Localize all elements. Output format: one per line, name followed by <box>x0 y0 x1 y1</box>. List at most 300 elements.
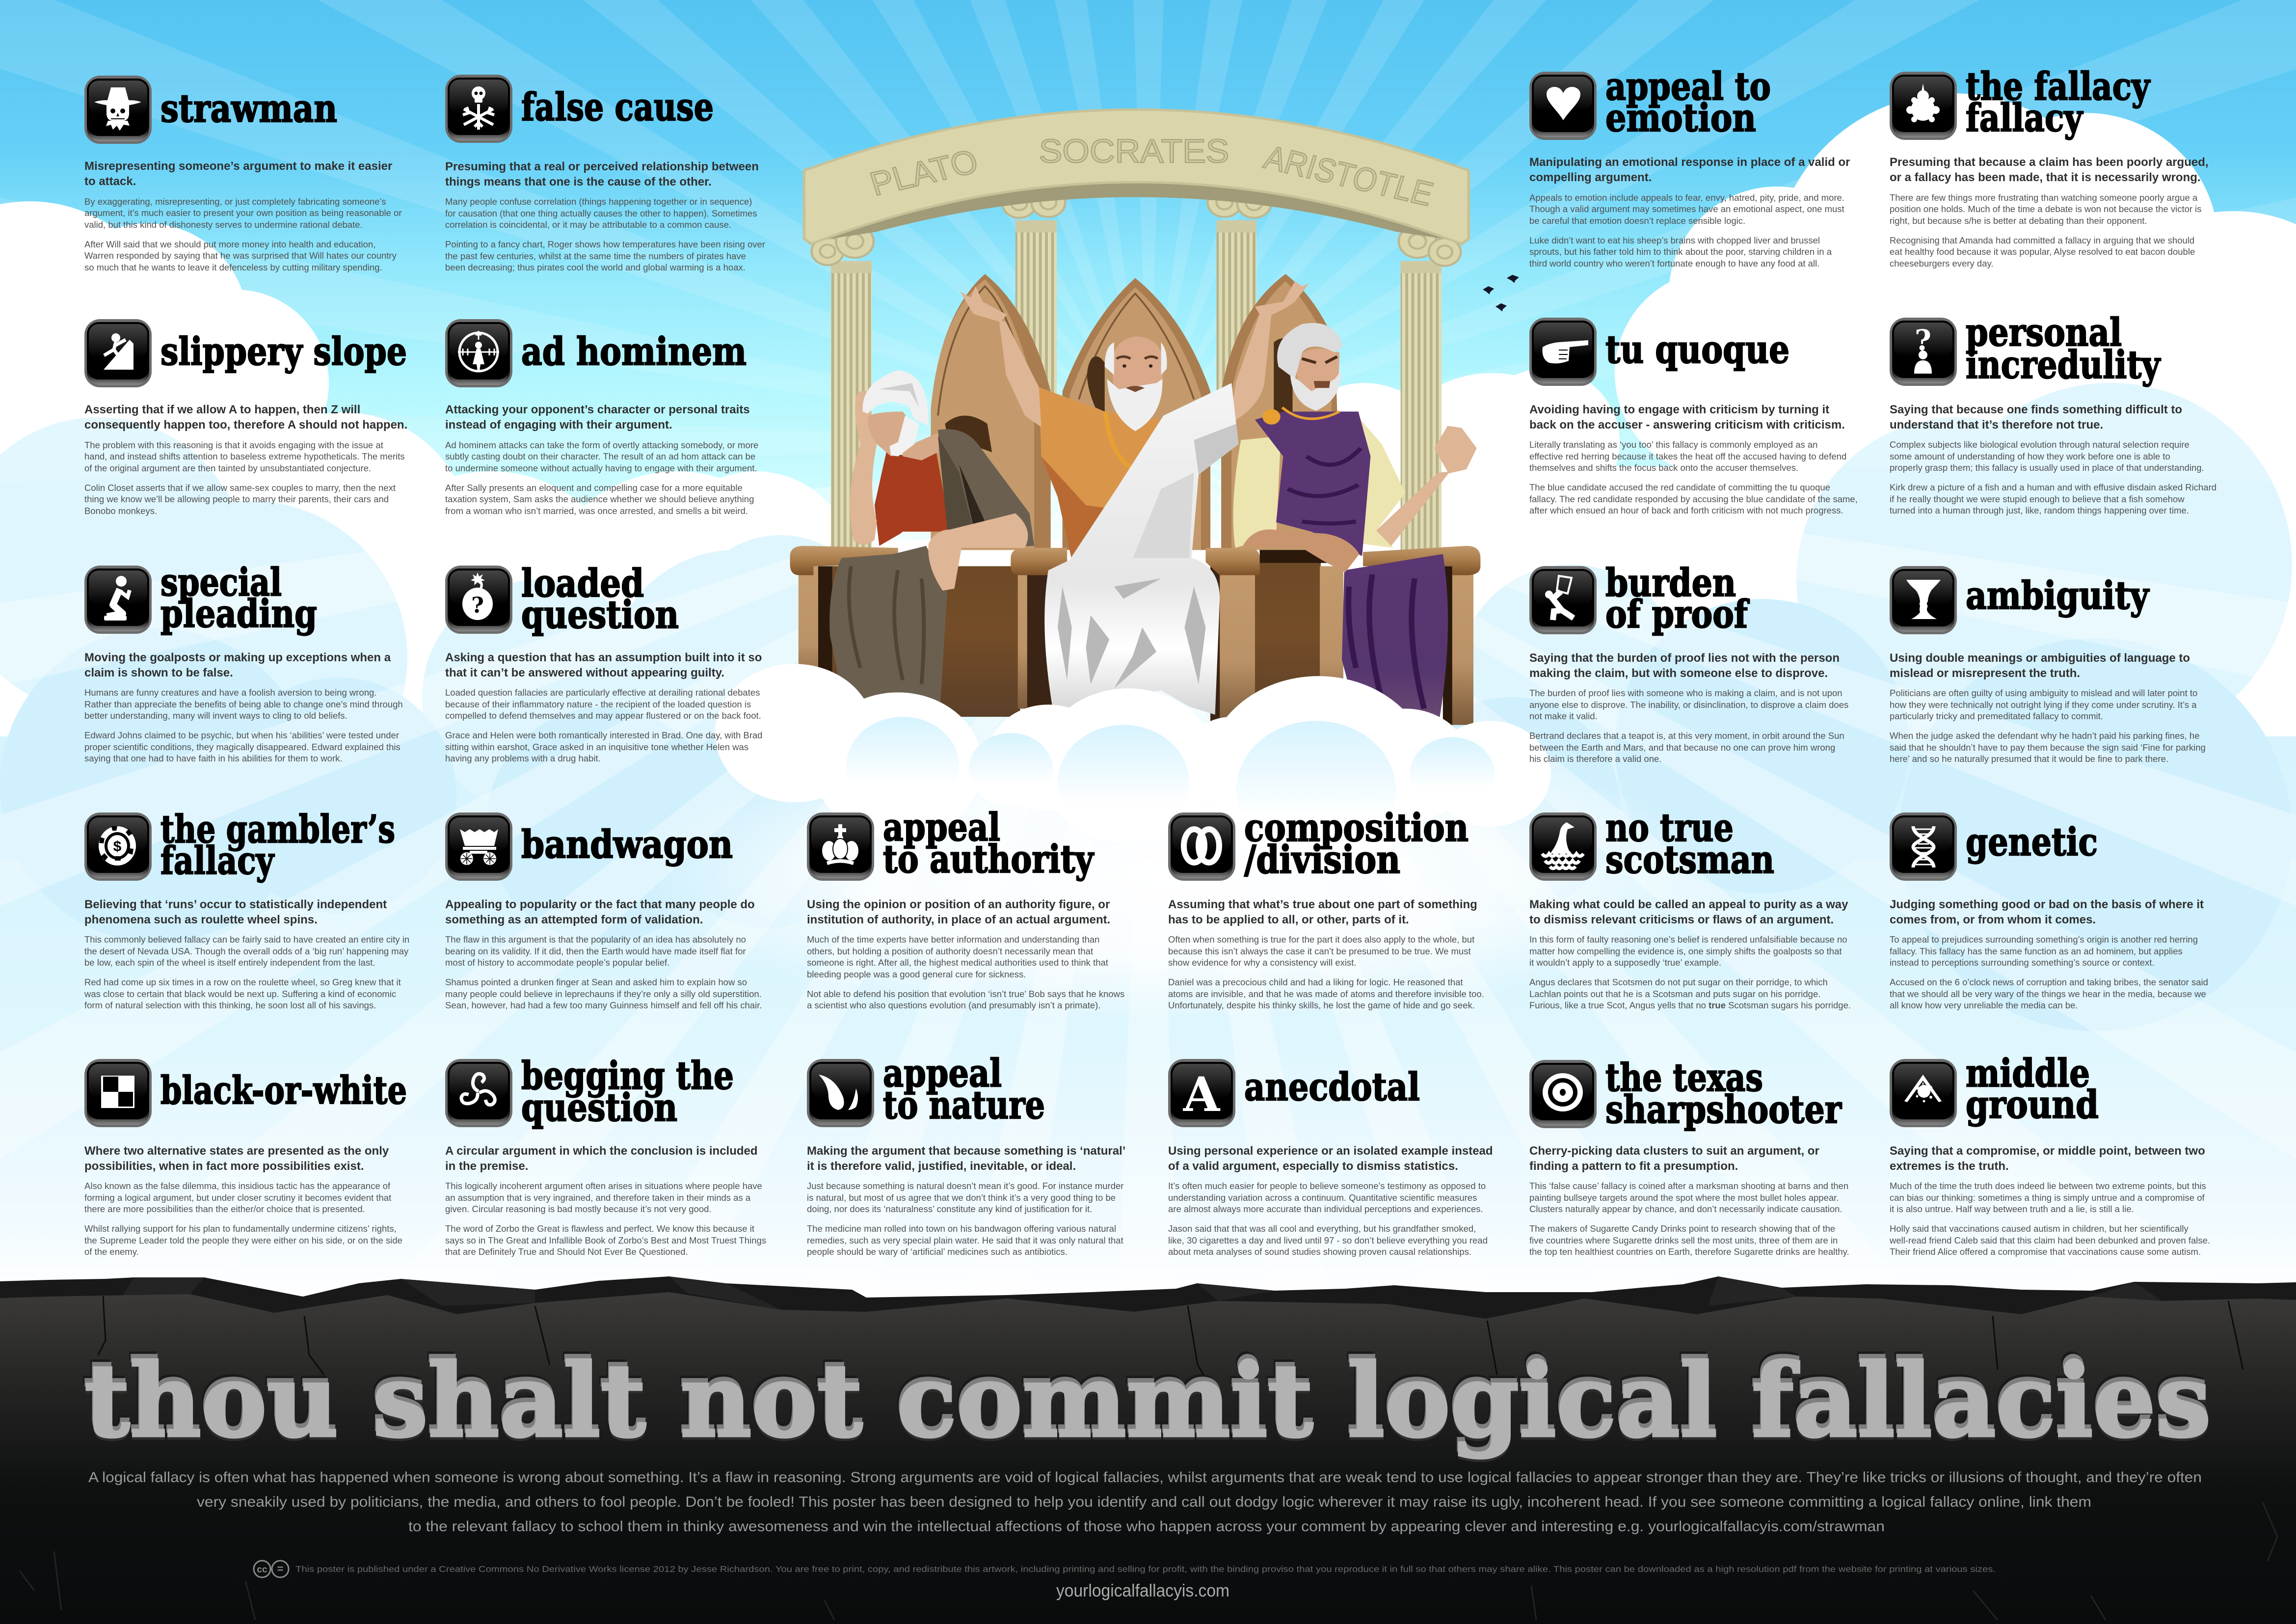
explanation and example: The burden of proof lies with someone who is making a claim, and is not upon <box>1529 688 1842 698</box>
icon: blackletter A: A <box>1183 1067 1221 1122</box>
explanation and example: of the original argument are then tainted by unsubstantiated conjecture. <box>84 463 371 473</box>
card: strawman <box>84 76 401 272</box>
explanation and example: form of natural selection with this thinking, he soon lost all of his savings. <box>84 1000 376 1010</box>
explanation and example: others, but holding a position of authority doesn’t necessarily mean that <box>807 946 1093 956</box>
explanation and example: is natural, but most of us agree that we don’t think it’s a very good thing to be <box>807 1192 1116 1203</box>
title: incredulity <box>1966 343 2161 387</box>
summary: Presuming that a real or perceived relationship between <box>445 160 759 173</box>
summary: it is therefore valid, justified, inevitable, or ideal. <box>807 1160 1076 1172</box>
explanation and example <box>1890 439 2216 524</box>
icon: scarecrow <box>84 76 152 144</box>
explanation and example: if he really thought we were stupid enough to believe that a fish somehow <box>1890 494 2185 504</box>
title: false cause <box>521 85 714 130</box>
card: genetic <box>1890 812 2233 1019</box>
explanation and example: Jason said that that was all cool and everything, but his grandfather smoked, <box>1168 1223 1476 1234</box>
summary: that it can’t be answered without appearing guilty. <box>445 666 724 679</box>
explanation and example: Just because something is natural doesn’t mean it’s good. For instance murder <box>807 1181 1123 1191</box>
explanation and example <box>1529 1180 1849 1266</box>
lower pale sky <box>0 638 2296 1296</box>
summary: Believing that ‘runs’ occur to statistically independent <box>84 897 387 911</box>
explanation and example: well-read friend Caleb said that this claim had been debunked and proven false. <box>1890 1235 2210 1245</box>
explanation and example: Unfortunately, despite his thinky skills, he lost the game of hide and go seek. <box>1168 1000 1475 1010</box>
explanation and example: Holly said that vaccinations caused autism in children, but her scientifically <box>1890 1223 2189 1234</box>
pale cloud layer, upper domes <box>0 383 2292 815</box>
summary <box>84 1143 389 1173</box>
explanation and example: There are few things more frustrating than watching someone poorly argue a <box>1890 192 2197 202</box>
explanation and example: some amount of understanding of how they work before one is able to <box>1890 451 2170 461</box>
explanation and example: compelled to defend themselves and may appear flustered or on the back foot. <box>445 710 761 721</box>
card: loaded question <box>445 566 789 772</box>
summary: understand that it’s therefore not true. <box>1890 418 2103 431</box>
summary <box>445 160 759 189</box>
explanation and example: understanding variation across a continuum. Quantitative scientific measures <box>1168 1192 1477 1203</box>
main title: thou shalt not commit logical fallacies <box>84 1342 2211 1460</box>
explanation and example: By exaggerating, misrepresenting, or just completely fabricating someone’s <box>84 196 386 206</box>
explanation and example: Sean, however, had had a few too many Guinness himself and fell off his chair. <box>445 1000 762 1010</box>
Aristotle figure <box>1233 323 1477 721</box>
explanation and example: to undermine someone without actually having to engage with their argument. <box>445 463 757 473</box>
summary: mislead or misrepresent the truth. <box>1890 667 2080 679</box>
summary: instead of engaging with their argument. <box>445 418 672 432</box>
explanation and example: In this form of faulty reasoning one’s belief is rendered unfalsifiable because no <box>1529 934 1847 945</box>
explanation and example: sprouts, but his father told him to think about the poor, starving children in a <box>1529 246 1832 257</box>
explanation and example: show evidence for why a consistency will exist. <box>1168 957 1357 968</box>
icon: overlapping rings <box>1168 812 1235 881</box>
explanation and example: Recognising that Amanda had committed a fallacy in arguing that we should <box>1890 235 2194 245</box>
explanation and example: remedies, such as very special plain water. He said that it was only natural that <box>807 1235 1123 1245</box>
explanation and example: When the judge asked the defendant why he hadn’t paid his parking fines, he <box>1890 731 2200 741</box>
summary: claim is shown to be false. <box>84 666 233 679</box>
explanation and example: better understanding, many will invent ways to cling to old beliefs. <box>84 710 347 721</box>
rock facets <box>123 1276 2162 1310</box>
explanation and example: Red had come up six times in a row on the roulette wheel, so Greg knew that it <box>84 977 401 987</box>
title: genetic <box>1966 820 2098 865</box>
explanation and example: The word of Zorbo the Great is flawless and perfect. We know this because it <box>445 1223 754 1234</box>
explanation and example: Many people confuse correlation (things happening together or in sequence) <box>445 196 752 207</box>
title: special <box>160 560 282 605</box>
licence credit line: This poster is published under a Creative Commons No Derivative Works license 2012 by Jesse Richardson. You are free to print, copy, and redistribute this artwork, including printing and selling for profit, with the binding proviso that you reproduce it in full so that others may share alike. This poster can be downloaded as a high resolution pdf from the website for printing at various sizes. <box>295 1564 1996 1574</box>
icon: bomb with question mark <box>445 566 512 634</box>
summary <box>445 650 762 680</box>
summary <box>1890 155 2209 185</box>
title: personal <box>1966 310 2122 355</box>
summary: institution of authority, in place of an actual argument. <box>807 913 1110 926</box>
explanation and example: particularly tricky and premeditated fallacy to commit. <box>1890 711 2103 721</box>
explanation and example: matter how compelling the evidence is, one simply shifts the goalposts so that <box>1529 946 1842 956</box>
website address: yourlogicalfallacyis.com <box>1056 1580 1229 1600</box>
explanation and example: The blue candidate accused the red candidate of committing the tu quoque <box>1529 482 1830 492</box>
creative commons icons <box>254 1561 289 1577</box>
rock cracks <box>98 1296 2243 1389</box>
explanation and example: the Supreme Leader told the people they were either on his side, or on the side <box>84 1235 402 1245</box>
explanation and example: Warren responded by saying that he was surprised that Will hates our country <box>84 250 397 261</box>
explanation and example: someone is right. After all, the highest medical authorities used to think that <box>807 957 1108 968</box>
column capitals <box>812 188 1461 266</box>
card: ambiguity <box>1890 566 2233 772</box>
summary: Making the argument that because something is ‘natural’ <box>807 1144 1125 1158</box>
title: appeal <box>883 1051 1002 1096</box>
explanation and example: because this isn’t always the case it can’t be presumed to be true. We must <box>1168 946 1471 956</box>
explanation and example <box>1890 934 2208 1019</box>
explanation and example: Shamus pointed a drunken finger at Sean and asked him to explain how so <box>445 977 747 987</box>
explanation and example: forming a logical argument, but under closer scrutiny it becomes evident that <box>84 1192 391 1203</box>
title <box>1603 1059 1878 1137</box>
summary <box>84 896 387 927</box>
summary <box>807 1143 1125 1173</box>
title <box>1603 812 1878 891</box>
explanation and example: To appeal to prejudices surrounding something’s origin is another red herring <box>1890 934 2198 945</box>
icon: bomb with question mark: ? <box>471 593 484 618</box>
arch inscriptions: ARISTOTLE <box>1260 138 1438 213</box>
summary: of a valid argument, especially to dismiss statistics. <box>1168 1160 1458 1172</box>
explanation and example: the past few centuries, whilst at the same time the numbers of pirates have <box>445 251 746 261</box>
main title: thou shalt not commit logical fallacies <box>83 1338 2210 1456</box>
introduction paragraph: to the relevant fallacy to school them in thinky awesomeness and win the intellectual affections of those who happen across your comment by appearing clever and interesting e.g. yourlogicalfallacyis.com/strawman <box>408 1518 1885 1535</box>
explanation and example: be careful that emotion doesn’t replace sensible logic. <box>1529 216 1745 226</box>
card: burden of proof <box>1529 566 1873 772</box>
main title: thou shalt not commit logical fallacies <box>82 1335 2209 1453</box>
explanation and example: After Sally presents an eloquent and compelling case for a more equitable <box>445 483 743 493</box>
summary: Appealing to popularity or the fact that many people do <box>445 897 755 911</box>
summary: or a fallacy has been made, that it is necessarily wrong. <box>1890 171 2201 184</box>
title: to nature <box>883 1083 1045 1128</box>
explanation and example: said that he shouldn’t have to pay them because the sign said ‘Fine for parking <box>1890 742 2206 753</box>
icon: blackletter A <box>1168 1059 1235 1127</box>
summary: Avoiding having to engage with criticism by turning it <box>1529 403 1829 416</box>
summary: Assuming that what’s true about one part of something <box>1168 897 1477 911</box>
title: to authority <box>883 837 1095 882</box>
sky gradient <box>0 0 2296 540</box>
card: anecdotal <box>1168 1059 1512 1265</box>
main title: thou shalt not commit logical fallacies <box>84 1345 2211 1462</box>
arch underside <box>813 181 1462 242</box>
temple columns <box>831 220 1442 554</box>
explanation and example <box>84 934 409 1019</box>
explanation and example <box>1890 687 2206 773</box>
icon: skull and snowflake <box>445 75 512 143</box>
explanation and example: it wouldn’t apply to a supposedly ‘true’ example. <box>1529 957 1721 968</box>
summary <box>1890 896 2204 927</box>
explanation and example: Politicians are often guilty of using ambiguity to mislead and will later point to <box>1890 688 2197 698</box>
throne backs <box>931 274 1342 550</box>
explanation and example: Though a valid argument may sometimes have an emotional aspect, one must <box>1529 204 1844 214</box>
explanation and example: instead to perceptions surrounding something’s source or context. <box>1890 957 2155 968</box>
icon: vase and faces <box>1890 566 1957 634</box>
dark rock foot: upper dark cliff edge <box>0 1276 2296 1375</box>
explanation and example: having any problems with a drug habit. <box>445 753 601 763</box>
card: the texas sharpshooter <box>1529 1059 1873 1265</box>
icon: road with splat <box>1890 1059 1957 1127</box>
explanation and example: that are Definitely True and Should Not Ever Be Questioned. <box>445 1246 688 1257</box>
title: tu quoque <box>1605 327 1789 372</box>
explanation and example: Appeals to emotion include appeals to fear, envy, hatred, pity, pride, and more. <box>1529 192 1844 202</box>
explanation and example: turned into a human through just, like, random things happening over time. <box>1890 505 2189 515</box>
explanation and example: like, 30 cigarettes a day and lived until 97 - so don’t believe everything you read <box>1168 1235 1488 1245</box>
title: emotion <box>1605 96 1756 140</box>
summary: phenomena such as roulette wheel spins. <box>84 913 318 926</box>
explanation and example: Much of the time the truth does indeed lie between two extreme points, but this <box>1890 1181 2206 1191</box>
summary: consequently happen too, therefore A should not happen. <box>84 418 407 432</box>
summary: Cherry-picking data clusters to suit an argument, or <box>1529 1144 1819 1158</box>
icon: mandelbrot fractal <box>1890 72 1957 140</box>
explanation and example: Literally translating as ‘you too’ this fallacy is commonly employed as an <box>1529 439 1817 450</box>
icon: person with question mark: ? <box>1915 324 1931 357</box>
summary: Asking a question that has an assumption built into it so <box>445 651 762 664</box>
summary: something as an attempted form of validation. <box>445 913 703 926</box>
explanation and example: here’ and so he naturally presumed that it would be fine to park there. <box>1890 754 2168 764</box>
icon: DNA helix <box>1890 812 1957 881</box>
Plato figure <box>829 370 1034 704</box>
explanation and example: most of history to accommodate people’s popular belief. <box>445 957 669 968</box>
title: ad hominem <box>521 329 747 374</box>
summary <box>1890 1143 2205 1173</box>
summary <box>1168 1143 1493 1173</box>
title: fallacy <box>160 839 275 883</box>
title: slippery slope <box>160 329 407 374</box>
summary: to attack. <box>84 175 136 188</box>
summary: Judging something good or bad on the basis of where it <box>1890 897 2204 911</box>
explanation and example: painting bullseye targets around the spot where the most bullet holes appear. <box>1529 1192 1839 1203</box>
explanation and example: Whilst rallying support for his plan to fundamentally undermine citizens’ rights, <box>84 1223 397 1234</box>
title: appeal to <box>1605 64 1771 109</box>
card: personal incredulity <box>1890 318 2233 524</box>
explanation and example: proper scientific conditions, they magically disappeared. Edward explained this <box>84 742 400 752</box>
icon: heart <box>1529 72 1597 140</box>
explanation and example: It’s often much easier for people to believe someone’s testimony as opposed to <box>1168 1181 1486 1191</box>
card: no true scotsman <box>1529 812 1873 1019</box>
card: black-or-white <box>84 1059 428 1265</box>
Socrates figure <box>960 281 1309 715</box>
explanation and example: Angus declares that Scotsmen do not put sugar on their porridge, to which <box>1529 977 1828 987</box>
explanation and example: After Will said that we should put more money into health and education, <box>84 239 375 249</box>
summary <box>807 896 1110 927</box>
title: question <box>521 593 679 637</box>
title: pleading <box>160 592 317 636</box>
icon: covered wagon <box>445 812 512 881</box>
title: loaded <box>521 561 644 606</box>
explanation and example: Daniel was a precocious child and had a liking for logic. He reasoned that <box>1168 977 1463 987</box>
explanation and example: saying that one had to have faith in his abilities for them to work. <box>84 753 343 763</box>
icon: kneeling figure <box>84 566 152 634</box>
explanation and example: there are more possibilities than the either/or choice that is presented. <box>84 1204 365 1214</box>
explanation and example: position one holds. Much of the time a debate is won not because the victor is <box>1890 204 2202 214</box>
explanation and example: Much of the time experts have better information and understanding than <box>807 934 1099 945</box>
title <box>158 566 433 644</box>
explanation and example: sitting within earshot, Grace asked in an inquisitive tone whether Helen was <box>445 742 748 752</box>
lower sun rays <box>0 442 2296 1301</box>
explanation and example <box>445 439 758 525</box>
explanation and example: Complex subjects like biological evolution through natural selection require <box>1890 439 2189 450</box>
card: composition/division <box>1168 812 1512 1019</box>
introduction paragraph: A logical fallacy is often what has happened when someone is wrong about something. It’s a flaw in reasoning. Strong arguments are void of logical fallacies, whilst arguments that are weak tend to use logical fallacies to appear stronger than they are. They’re like tricks or illusions of thought, and they’re often <box>88 1469 2202 1486</box>
explanation and example: valid, but this kind of dishonesty serves to undermine rational debate. <box>84 219 363 230</box>
icon: loch ness monster <box>1529 812 1597 881</box>
explanation and example: This ‘false cause’ fallacy is coined after a marksman shooting at barns and then <box>1529 1181 1848 1191</box>
summary: in the premise. <box>445 1160 528 1172</box>
pale cloud layer, lower domes <box>0 599 2296 1031</box>
explanation and example: The medicine man rolled into town on his bandwagon offering various natural <box>807 1223 1116 1234</box>
summary: Asserting that if we allow A to happen, then Z will <box>84 403 360 416</box>
title: the fallacy <box>1966 64 2151 109</box>
explanation and example <box>807 1180 1123 1266</box>
upper sun rays <box>0 0 2296 482</box>
explanation and example: given. Circular reasoning is bad mostly because it’s not very good. <box>445 1204 712 1214</box>
explanation and example: effective red herring because it takes the heat off the accused having to defend <box>1529 451 1846 461</box>
card: appeal to authority <box>807 812 1150 1019</box>
explanation and example: Bonobo monkeys. <box>84 506 157 516</box>
explanation and example: Pointing to a fancy chart, Roger shows how temperatures have been rising over <box>445 239 765 249</box>
summary: Saying that a compromise, or middle point, between two <box>1890 1144 2205 1158</box>
explanation and example: so much that he wants to leave it defenceless by cutting military spending. <box>84 262 382 272</box>
explanation and example: an assumption that is very ingrained, and therefore taken in their minds as a <box>445 1192 750 1203</box>
summary <box>1529 402 1845 432</box>
title: anecdotal <box>1244 1065 1420 1110</box>
creative commons icons: cc <box>257 1565 267 1575</box>
explanation and example <box>1890 191 2202 277</box>
explanation and example <box>1529 687 1848 773</box>
explanation and example: are almost always more accurate than individual perceptions and experiences. <box>1168 1204 1483 1214</box>
arch face <box>804 109 1468 244</box>
explanation and example: the top ten healthiest countries on Earth, therefore Sugarette drinks are healthy. <box>1529 1246 1849 1257</box>
explanation and example: This logically incoherent argument often arises in situations where people have <box>445 1181 762 1191</box>
summary: Misrepresenting someone’s argument to make it easier <box>84 160 392 173</box>
summary: Using double meanings or ambiguities of language to <box>1890 651 2190 665</box>
explanation and example: for causation (that one thing actually causes the other to happen). Sometimes <box>445 208 757 218</box>
explanation and example <box>84 687 403 772</box>
explanation and example: Loaded question fallacies are particularly effective at derailing rational debates <box>445 687 760 698</box>
explanation and example <box>445 934 762 1019</box>
arch inscriptions: SOCRATES <box>1039 133 1229 170</box>
explanation and example: subtly casting doubt on their character. The result of an ad hom attack can be <box>445 451 755 461</box>
icon: leaves <box>807 1059 874 1127</box>
summary: extremes is the truth. <box>1890 1160 2009 1172</box>
arch inscriptions: PLATO <box>866 142 983 203</box>
foreground clouds <box>715 664 1551 871</box>
explanation and example: correlation is coincidental, or it may be attributable to a common cause. <box>445 219 731 230</box>
card: bandwagon <box>445 812 789 1019</box>
introduction paragraph: very sneakily used by politicians, the media, and others to fool people. Don’t be fooled! This poster has been designed to help you identify and call out dodgy logic wherever it may raise its ugly, incoherent head. If you see someone committing a logical fallacy online, link them <box>197 1494 2091 1510</box>
explanation and example: third world country who weren’t fortunate enough to have any food at all. <box>1529 258 1819 269</box>
explanation and example: after which ensued an hour of back and forth criticism with not much progress. <box>1529 505 1843 515</box>
explanation and example: between the Earth and Mars, and that because no one can prove him wrong <box>1529 742 1835 753</box>
explanation and example: Colin Closet asserts that if we allow same-sex couples to marry, then the next <box>84 483 396 493</box>
white clouds: right bank <box>1281 93 2296 736</box>
explanation and example: not make it valid. <box>1529 711 1598 721</box>
summary <box>1529 650 1840 680</box>
title: no true <box>1605 806 1734 850</box>
title: bandwagon <box>521 822 733 867</box>
summary <box>445 1143 758 1173</box>
explanation and example: people should be wary of ‘artificial’ medicines such as antibiotics. <box>807 1246 1068 1257</box>
explanation and example: Lachlan points out that he is a Scotsman and puts sugar on his porridge. <box>1529 989 1820 999</box>
title <box>881 1059 1155 1137</box>
explanation and example: thing we know we’ll be allowing people to marry their parents, their cars and <box>84 494 389 504</box>
title: begging the <box>521 1054 734 1098</box>
explanation and example: doing, nor does its ‘naturalness’ constitute any kind of justification for it. <box>807 1204 1092 1214</box>
explanation and example: because of their inflammatory nature - the recipient of the loaded question is <box>445 699 751 709</box>
icon: pointing hand <box>1529 318 1597 386</box>
explanation and example: properly grasp them; this fallacy is usually used in place of that understanding. <box>1890 462 2204 473</box>
explanation and example: Not able to defend his position that evolution ‘isn’t true’ Bob says that he knows <box>807 989 1124 999</box>
card: slippery slope <box>84 319 428 525</box>
summary <box>1168 896 1477 927</box>
explanation and example <box>445 687 762 772</box>
explanation and example <box>1529 934 1851 1019</box>
title: burden <box>1605 561 1736 605</box>
icon: figure in crosshairs <box>445 319 512 387</box>
explanation and example: The makers of Sugarette Candy Drinks point to research showing that of the <box>1529 1223 1835 1234</box>
icon: casino chip <box>84 812 152 881</box>
explanation and example: The flaw in this argument is that the popularity of an idea has absolutely no <box>445 934 746 945</box>
explanation and example: Ad hominem attacks can take the form of overtly attacking somebody, or more <box>445 440 758 450</box>
glow behind the temple <box>844 358 1453 869</box>
summary <box>1890 650 2190 680</box>
explanation and example: be low, each spin of the wheel is itself entirely independent from the last. <box>84 957 375 968</box>
title <box>519 1059 794 1137</box>
summary: A circular argument in which the conclusion is included <box>445 1144 758 1158</box>
explanation and example: fallacy. The red candidate responded by accusing the blue candidate of the same, <box>1529 494 1858 504</box>
summary: Manipulating an emotional response in place of a valid or <box>1529 156 1850 169</box>
summary: things means that one is the cause of the other. <box>445 175 712 189</box>
title: the gambler’s <box>160 807 395 852</box>
explanation and example: that we should all be very wary of the things we hear in the media, because we <box>1890 989 2206 999</box>
summary: Making what could be called an appeal to purity as a way <box>1529 897 1848 911</box>
explanation and example <box>807 934 1124 1019</box>
explanation and example <box>1890 1180 2210 1266</box>
summary <box>445 896 755 927</box>
card: the fallacy fallacy <box>1890 72 2233 278</box>
summary: possibilities, when in fact more possibilities exist. <box>84 1160 364 1172</box>
title: black-or-white <box>160 1068 407 1113</box>
summary <box>1529 1143 1819 1173</box>
icon: target <box>1529 1060 1597 1128</box>
title <box>1242 812 1517 891</box>
explanation and example: Kirk drew a picture of a fish and a human and with effusive disdain asked Richard <box>1890 482 2216 492</box>
icon: casino chip: $ <box>113 839 122 855</box>
white clouds: left bank <box>0 201 854 756</box>
card: tu quoque <box>1529 318 1873 524</box>
explanation and example: Rather than appreciate the benefits of being able to change one’s mind through <box>84 699 403 709</box>
explanation and example: of the enemy. <box>84 1246 139 1257</box>
explanation and example <box>1168 1180 1488 1266</box>
summary: to dismiss relevant criticisms or flaws of an argument. <box>1529 913 1834 926</box>
explanation and example: eat healthy food because it was popular, Alyse resolved to eat bacon double <box>1890 246 2195 257</box>
title: /division <box>1244 838 1400 882</box>
throne bases <box>790 546 1480 725</box>
icon: crown <box>807 812 874 881</box>
arch inscriptions <box>866 133 1438 213</box>
title <box>1603 566 1878 645</box>
title: ground <box>1966 1083 2099 1127</box>
explanation and example: been decreasing; thus pirates cool the world and global warming is a hoax. <box>445 262 746 272</box>
dark rock foot: main slab with title area <box>0 1292 2296 1624</box>
explanation and example: cheeseburgers every day. <box>1890 258 1994 269</box>
summary: Using personal experience or an isolated example instead <box>1168 1144 1493 1158</box>
explanation and example: says so in The Great and Infallible Book of Zorbo’s Best and Most Truest Things <box>445 1235 766 1245</box>
title: question <box>521 1085 677 1130</box>
explanation and example <box>1529 192 1844 269</box>
explanation and example: the desert of Nevada USA. Though the overall odds of a ‘big run’ happening may <box>84 946 408 956</box>
explanation and example: Bertrand declares that a teapot is, at this very moment, in orbit around the Sun <box>1529 731 1844 741</box>
title: sharpshooter <box>1605 1087 1842 1132</box>
summary: compelling argument. <box>1529 171 1652 184</box>
summary: back on the accuser - answering criticism with criticism. <box>1529 418 1845 431</box>
explanation and example: about meta analyses of sound studies showing proven causal relationships. <box>1168 1246 1471 1257</box>
summary: Saying that because one finds something difficult to <box>1890 403 2182 416</box>
explanation and example: Humans are funny creatures and have a foolish aversion to being wrong. <box>84 687 376 698</box>
icon: person with question mark <box>1890 318 1957 386</box>
title: ambiguity <box>1966 573 2150 618</box>
